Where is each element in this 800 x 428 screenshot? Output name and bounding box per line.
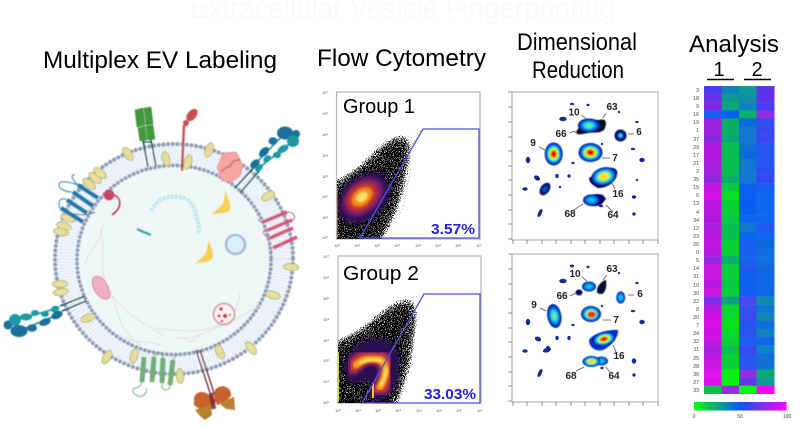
row labels: 2: [696, 169, 699, 175]
axis labels: 10⁵: [436, 408, 442, 413]
row labels: 12: [693, 226, 699, 232]
row labels: [693, 88, 699, 394]
density scatter: [338, 294, 420, 403]
axis ticks: [508, 254, 658, 406]
axis labels: 10¹: [355, 408, 361, 413]
row labels: 23: [693, 234, 699, 240]
gate: [360, 129, 479, 238]
row labels: 21: [693, 161, 699, 167]
axis labels: 10⁰: [335, 408, 341, 413]
row labels: 36: [693, 372, 699, 378]
value: 3.57%: 3.57%: [431, 222, 475, 238]
heading: Dimensional Reduction: Dimensional: [517, 29, 637, 56]
row labels: 27: [693, 380, 699, 386]
axis ticks: [508, 92, 658, 244]
value: 33.03%: 33.03%: [424, 387, 476, 403]
axis labels: 10⁵: [435, 243, 441, 248]
cluster labels: [531, 264, 643, 382]
cluster labels: 7: [613, 315, 619, 326]
row labels: 31: [693, 274, 699, 280]
axis labels: 10⁴: [416, 408, 422, 413]
axis labels: 10²: [323, 358, 329, 363]
axis labels: 10⁶: [456, 408, 462, 413]
colour bar legend: 0: [693, 414, 696, 420]
cluster labels: 10: [568, 108, 580, 118]
axis labels: 10⁴: [415, 243, 421, 248]
axis labels: 10⁶: [455, 243, 461, 248]
ring vesicle: [226, 235, 245, 254]
axis labels: [322, 90, 482, 248]
axis labels: 10⁶: [322, 111, 328, 116]
heading: Dimensional Reduction: Reduction: [532, 57, 624, 84]
label: Group 2: Group 2: [343, 263, 419, 285]
row labels: 33: [693, 388, 699, 394]
group labels: 1: [713, 59, 725, 81]
heading: Flow Cytometry: Flow Cytometry: [317, 45, 486, 72]
cluster labels: 68: [564, 209, 576, 220]
row labels: 0: [696, 250, 699, 256]
axis labels: 10²: [374, 243, 380, 248]
axis labels: 10⁰: [323, 400, 329, 405]
cluster labels: 68: [565, 371, 577, 382]
heatmap cells: [704, 86, 774, 394]
axis labels: 10⁴: [323, 317, 329, 322]
axis labels: 10⁴: [322, 153, 328, 158]
axis labels: 10⁷: [323, 254, 329, 259]
protein: green receptor: [135, 107, 156, 167]
cluster labels: 9: [530, 138, 536, 149]
row labels: 17: [693, 153, 699, 159]
density clusters: [537, 118, 626, 206]
cluster labels: 63: [606, 102, 618, 113]
colour bar legend: [693, 402, 791, 420]
protein: magenta fragment: [104, 190, 120, 215]
cluster labels: 16: [613, 351, 625, 362]
protein: red stalk: [182, 107, 200, 171]
axis labels: 10⁷: [477, 408, 483, 413]
panel: reduction map group 2: [508, 254, 658, 406]
cluster labels: 7: [612, 153, 618, 164]
cluster labels: 66: [555, 129, 567, 140]
axis labels: 10³: [323, 338, 329, 343]
label arrows: [540, 275, 634, 374]
protein: green seven-pass receptor: [133, 352, 178, 396]
cluster labels: 16: [612, 189, 624, 200]
axis labels: 10⁷: [476, 243, 482, 248]
cluster labels: 63: [606, 264, 618, 275]
group labels: [707, 59, 771, 81]
lysosome: [214, 304, 234, 324]
axis labels: 10³: [322, 174, 328, 179]
axis labels: 10⁰: [334, 243, 340, 248]
row labels: 14: [693, 266, 699, 272]
axis labels: 10²: [322, 194, 328, 199]
row labels: 26: [693, 242, 699, 248]
row labels: 24: [693, 331, 699, 337]
protein: left antibody complex: [4, 296, 86, 337]
row labels: 8: [696, 307, 699, 313]
row labels: 16: [693, 112, 699, 118]
axis labels: 10²: [375, 408, 381, 413]
row labels: 18: [693, 96, 699, 102]
cluster labels: 9: [531, 300, 537, 311]
row labels: 7: [696, 323, 699, 329]
row labels: 25: [693, 356, 699, 362]
row labels: 9: [696, 104, 699, 110]
heading: Dimensional Reduction: [517, 29, 637, 84]
heading: Analysis: Analysis: [689, 31, 779, 58]
cluster labels: 64: [608, 371, 620, 382]
cluster labels: 64: [607, 210, 619, 221]
protein: top-right antibody complex: [235, 126, 300, 193]
axis labels: 10⁵: [323, 296, 329, 301]
membrane: [55, 144, 293, 374]
row labels: 4: [696, 210, 699, 216]
small clusters: [522, 265, 644, 377]
row labels: 10: [693, 283, 699, 289]
row labels: 22: [693, 299, 699, 305]
protein: bottom brown complex: [194, 350, 235, 420]
row labels: 3: [696, 88, 699, 94]
lipid rafts: [52, 142, 299, 384]
row labels: 20: [693, 315, 699, 321]
panel: flow plot group 1: [322, 90, 482, 250]
row labels: 11: [694, 347, 699, 353]
axis labels: 10¹: [323, 379, 329, 384]
density scatter: [337, 131, 420, 239]
row labels: 5: [696, 258, 699, 264]
density clusters: [545, 280, 625, 367]
row labels: 28: [693, 364, 699, 370]
axis labels: 10¹: [322, 215, 328, 220]
banana organelle upper: [212, 190, 230, 214]
row labels: 32: [693, 339, 699, 345]
mitochondrion: [92, 276, 110, 299]
row labels: 15: [693, 185, 699, 191]
row labels: 29: [693, 145, 699, 151]
row labels: 19: [693, 120, 699, 126]
row labels: 13: [693, 201, 699, 207]
group labels: 2: [751, 59, 763, 81]
cluster labels: 66: [556, 291, 568, 302]
cluster labels: 6: [636, 127, 642, 138]
small clusters: [522, 103, 644, 217]
cluster labels: 6: [637, 289, 643, 300]
label: Group 1: Group 1: [343, 96, 415, 118]
DNA strand: [151, 197, 199, 234]
axis labels: [323, 254, 483, 413]
axis labels: 10³: [395, 408, 401, 413]
cluster labels: [530, 102, 642, 221]
colour bar legend: 50: [737, 414, 743, 420]
heading: Multiplex EV Labeling: Multiplex EV Labeling: [43, 47, 277, 74]
axis labels: 10⁷: [322, 90, 328, 95]
row labels: 6: [696, 193, 699, 199]
panel: flow plot group 2: [323, 254, 483, 414]
row labels: 30: [693, 291, 699, 297]
row labels: 35: [693, 177, 699, 183]
row labels: 1: [696, 128, 699, 134]
axis labels: 10⁶: [323, 275, 329, 280]
row labels: 37: [693, 137, 699, 143]
panel: heatmap: [693, 59, 791, 420]
protein: pink seven-pass receptor: [258, 212, 297, 254]
row labels: 34: [693, 218, 699, 224]
axis labels: 10⁵: [322, 132, 328, 137]
axis labels: 10¹: [354, 243, 360, 248]
label arrows: [539, 113, 634, 212]
panel: vesicle illustration: [4, 107, 300, 420]
panel: reduction map group 1: [508, 92, 658, 244]
banana organelle lower: [195, 239, 213, 264]
teal rod: [137, 229, 151, 235]
protein: pink barrel: [217, 152, 243, 182]
colour bar legend: 100: [783, 414, 791, 420]
cytoskeleton fibres: [85, 225, 262, 345]
gate: [362, 294, 480, 403]
cluster labels: 10: [569, 269, 581, 280]
protein: blue seven-pass receptor: [59, 175, 98, 222]
axis labels: 10⁰: [322, 235, 328, 240]
axis labels: 10³: [394, 243, 400, 248]
